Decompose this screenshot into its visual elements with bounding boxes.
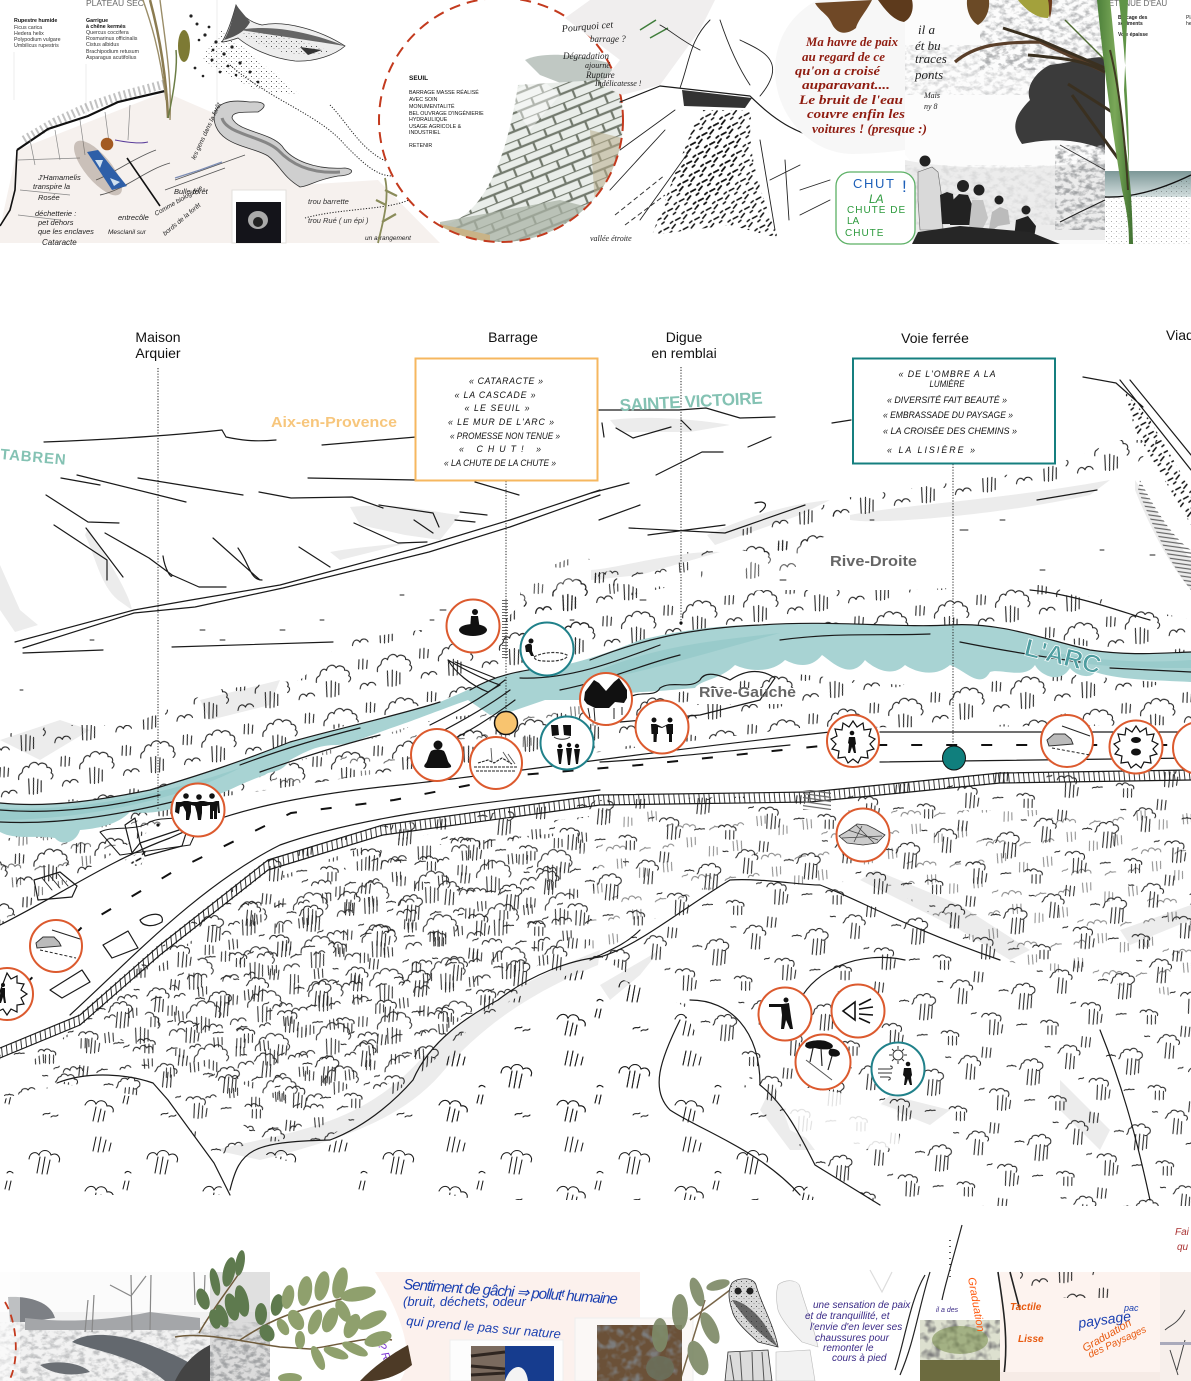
seuil text [409, 75, 484, 149]
hatched scarps and bank bushes [20, 392, 1191, 690]
plant list: plateau sec: Polypodium vulgare [14, 37, 61, 43]
location labels: Digue [666, 329, 702, 345]
green CHUT note: CHUTE DE [847, 205, 906, 216]
grass specimen [143, 0, 190, 120]
old photograph [905, 0, 1105, 244]
red handwritten note: auparavant.... [802, 78, 890, 92]
seuil text: HYDRAULIQUE [409, 117, 448, 123]
grass tuft over circle [376, 178, 397, 243]
plant list: plateau sec: Brachipodium retusum [86, 49, 140, 55]
plant list: plateau sec: Ficus carica [14, 25, 42, 31]
old photograph: traces [915, 51, 947, 66]
purple handwritten note: l'envie d'en lever ses [810, 1322, 902, 1333]
quote box: barrage: « PROMESSE NON TENUE » [450, 431, 560, 441]
annotated paper with cliff section [0, 84, 440, 243]
icon: partial circle at right edge [1173, 722, 1191, 774]
green CHUT note: LA [869, 192, 884, 206]
icon: two people shaking hands [636, 700, 688, 754]
red handwritten note: voitures ! (presque :) [812, 122, 927, 136]
acacia branch [175, 1249, 393, 1381]
handwritten notes: transpire la [33, 182, 70, 191]
quote box: barrage: « LA CASCADE » [454, 390, 536, 400]
icon: debris [470, 737, 522, 789]
polaroid: undergrowth [575, 1318, 693, 1381]
place names: SAINTE VICTOIRE [619, 389, 763, 415]
note paper: pourquoi ce barrage: Indélicatesse ! [594, 79, 642, 88]
plant list: plateau sec: Hedera helix [14, 31, 44, 37]
red handwritten note: Le bruit de l'eau [798, 93, 903, 107]
detail circle: seuil [379, 0, 630, 245]
right panel: retenue d'eau [1103, 0, 1191, 244]
location labels: en remblai [651, 345, 717, 361]
old photograph: ét bu [915, 38, 941, 53]
pale note with orange and blue writing: Graduation [1080, 1317, 1134, 1355]
handwritten notes: trou barrette [308, 197, 349, 206]
icon: sitting meditator [411, 729, 463, 781]
quote box: voie ferree [853, 358, 1055, 464]
right panel: retenue d'eau: sédiments [1118, 21, 1143, 27]
pale note with orange and blue writing [936, 1272, 1160, 1381]
quote box: voie ferree: « EMBRASSADE DU PAYSAGE » [883, 410, 1013, 420]
seuil text: BEL OUVRAGE D'INGÉNIERIE [409, 110, 484, 117]
plant list: plateau sec: Garrigue [86, 18, 108, 24]
icon: car on road, left [30, 920, 82, 972]
location labels: Arquier [135, 345, 181, 361]
pale note with orange and blue writing: il a des [936, 1307, 959, 1314]
quote box: voie ferree: « LA CROISÉE DES CHEMINS » [883, 426, 1017, 436]
houses by the road [34, 818, 188, 998]
icon: starburst hiker [827, 715, 879, 767]
grey terrain washes [0, 418, 1191, 1160]
seuil text: AVEC SOIN [409, 97, 438, 103]
quote box: barrage: « CATARACTE » [469, 376, 543, 386]
old photograph: Mais [923, 91, 940, 100]
location lines [156, 367, 953, 827]
quote box: barrage: « LE SEUIL » [464, 403, 530, 413]
place names: Rive-Droite [830, 553, 917, 570]
owl engraving [725, 1279, 818, 1381]
marker dots [494, 712, 966, 770]
note paper: pourquoi ce barrage: barrage ? [590, 34, 626, 44]
red handwritten note: au regard de ce [802, 50, 885, 64]
handwritten notes [33, 101, 412, 247]
group of people [918, 156, 1036, 238]
red handwritten note: qu'on a croisé [795, 64, 881, 78]
top right red note: Fai [1175, 1227, 1190, 1238]
quote box: barrage: « LE MUR DE L'ARC » [448, 417, 554, 427]
plant list: plateau sec: à chêne kermès [86, 24, 126, 30]
plant list: plateau sec [14, 0, 217, 120]
top right red note [1175, 1227, 1190, 1253]
illustrated landscape map [0, 327, 1191, 1206]
plant list: plateau sec: Asparagus acutifolius [86, 55, 137, 61]
quote box: voie ferree: « LA LISIÈRE » [887, 445, 975, 455]
pink note with blue handwriting [360, 1272, 640, 1381]
plant list: plateau sec: Rupestre humide [14, 18, 57, 24]
icon: sun, wind and hiker [872, 1042, 924, 1096]
handwritten notes: déchetterie : [35, 209, 76, 218]
plastic bottle and brown marker [66, 134, 130, 202]
place names: L'ARC [1022, 634, 1104, 680]
icon: pine trees on slope [796, 1034, 850, 1090]
location labels: Maison [135, 329, 181, 345]
icon: wood pile [836, 808, 890, 862]
railway [0, 770, 1191, 1058]
viaduct sketch [590, 20, 845, 243]
purple handwritten note: cours à pied [832, 1353, 887, 1364]
icon: group holding hands [172, 784, 224, 836]
seuil text: USAGE AGRICOLE & [409, 124, 462, 130]
icon: eye and sound [832, 984, 884, 1038]
quote box: voie ferree: LUMIÈRE [930, 379, 965, 389]
right edge paper [1160, 1272, 1191, 1381]
pale note with orange and blue writing: des Paysages [1087, 1324, 1148, 1361]
pale note with orange and blue writing: Graduation [965, 1276, 986, 1333]
old photograph: il a [918, 22, 935, 37]
icon: starburst hiker, left [0, 968, 33, 1020]
ink lines and twig [870, 1225, 962, 1375]
pink note with blue handwriting: Sentiment de gâchi ⇒ pollutᵗ humaine [403, 1276, 618, 1308]
seuil text: SEUIL [409, 75, 428, 82]
seuil text: INDUSTRIEL [409, 130, 441, 136]
seuil text: BARRAGE MASSE RÉALISÉ [409, 89, 479, 96]
top collage band [0, 0, 1191, 247]
pale note with orange and blue writing: paysage [1076, 1308, 1132, 1331]
pale note with orange and blue writing: pac [1123, 1303, 1139, 1313]
red handwritten note: Ma havre de paix [805, 35, 898, 49]
quote box: barrage: « LA CHUTE DE LA CHUTE » [444, 458, 556, 468]
purple handwritten note: remonter le [823, 1343, 874, 1354]
bottom collage band [0, 1225, 1191, 1381]
dotted trail [230, 65, 490, 218]
Arc river [0, 623, 1191, 843]
pale note with orange and blue writing: Lisse [1018, 1334, 1044, 1345]
stipple swarm [189, 14, 300, 95]
handwritten notes: un arrangement [365, 235, 412, 242]
place names: TABREN [0, 446, 67, 469]
icon: crouching person by shore [520, 622, 574, 676]
old photograph: ny 8 [924, 102, 938, 111]
ridge outlines [57, 880, 1150, 1205]
icon: dark tree canopy [580, 673, 632, 725]
leaves and dark seed heads [955, 0, 1130, 175]
place names [0, 389, 1104, 701]
seuil text: MONUMENTALITÉ [409, 103, 455, 110]
right panel: retenue d'eau: Blocage des [1118, 15, 1148, 21]
handwritten notes: que les enclaves [38, 227, 94, 236]
note paper: pourquoi ce barrage: Pourquoi cet [560, 20, 614, 35]
icon: hunter [758, 988, 812, 1040]
icon: waterfall and group [540, 716, 594, 770]
pink note with blue handwriting: qui prend le pas sur nature [406, 1313, 561, 1341]
handwritten notes: Mesclanil sur [108, 229, 147, 236]
green CHUT note: CHUTE [845, 228, 884, 239]
handwritten notes: Bulle forêt [174, 187, 209, 196]
polaroid [232, 190, 286, 243]
green CHUT note: LA [847, 216, 860, 227]
note paper: pourquoi ce barrage: Dégradation [562, 51, 609, 61]
note paper: pourquoi ce barrage: Rupture [585, 70, 615, 80]
old photograph: ponts [914, 67, 943, 82]
quote box: voie ferree: « DIVERSITÉ FAIT BEAUTÉ » [887, 395, 1007, 405]
ash branch [646, 1276, 731, 1381]
plant list: plateau sec: Rosmarinus officinalis [86, 36, 138, 42]
trout [222, 5, 345, 61]
white clearings [0, 688, 1191, 1150]
plant list: plateau sec: Quercus coccifera [86, 30, 129, 36]
purple handwritten note: une sensation de paix [813, 1300, 911, 1311]
purple handwritten note: chaussures pour [815, 1333, 890, 1344]
seuil text: RETENIR [409, 143, 432, 149]
vegetation texture fields [0, 570, 1191, 1206]
quote box: barrage: « CHUT! » [459, 444, 541, 454]
note paper: pourquoi ce barrage [560, 0, 715, 95]
purple handwritten note: et de tranquillité, et [805, 1311, 891, 1322]
green CHUT note [836, 172, 915, 244]
handwritten notes: trou Rué ( un épi ) [308, 216, 369, 225]
icon: person on boat [446, 600, 500, 652]
location labels: Barrage [488, 329, 538, 345]
polaroid: rushes [450, 1340, 563, 1381]
location labels [135, 327, 1191, 361]
reed blade [1097, 0, 1133, 244]
pink note with blue handwriting: (bruit, déchets, odeur [403, 1294, 527, 1309]
pink note with blue handwriting: ? R ? [375, 1342, 396, 1372]
green photo [920, 1320, 1000, 1381]
handwritten notes: Comme biologique [154, 184, 204, 218]
location labels: Voie ferrée [901, 330, 969, 346]
note paper: pourquoi ce barrage: ajourné [585, 61, 610, 70]
handwritten notes: J'Hamamelis [37, 173, 81, 182]
handwritten notes: Cataracte [42, 238, 77, 247]
road [0, 732, 1191, 1015]
quote box: voie ferree: « DE L'OMBRE A LA [898, 369, 996, 379]
plant list: plateau sec: Umbilicus rupestris [14, 43, 59, 49]
quote box: barrage [416, 358, 598, 480]
icon: starburst with two shapes [1110, 720, 1162, 774]
handwritten notes: bords de la forêt [162, 201, 203, 238]
handwritten notes: les gens dans la forêt [190, 101, 223, 161]
handwritten notes: Rosée [38, 193, 60, 202]
plant list: plateau sec: Cistus albidus [86, 42, 119, 48]
green CHUT note: ! [902, 177, 907, 196]
bushes framing the river [100, 671, 775, 855]
red handwritten note [775, 0, 927, 154]
viaduct sketch: vallée étroite [590, 234, 632, 243]
top right red note: qu [1177, 1242, 1189, 1253]
pale note with orange and blue writing: Tactile [1010, 1302, 1042, 1313]
green CHUT note: CHUT [853, 176, 896, 191]
icon: car on road [1041, 715, 1093, 767]
place names: Aix-en-Provence [271, 414, 397, 431]
mountain ridges [15, 377, 1191, 653]
handwritten notes: entrecôle [118, 213, 149, 222]
right panel: retenue d'eau: Voie épaisse [1118, 32, 1148, 38]
handwritten notes: pet dehors [37, 218, 74, 227]
purple handwritten note [805, 1300, 911, 1364]
red handwritten note: couvre enfin les [807, 107, 905, 121]
marsh photograph [0, 1272, 270, 1381]
eel [214, 101, 352, 187]
place names: Rive-Gauche [699, 684, 796, 701]
